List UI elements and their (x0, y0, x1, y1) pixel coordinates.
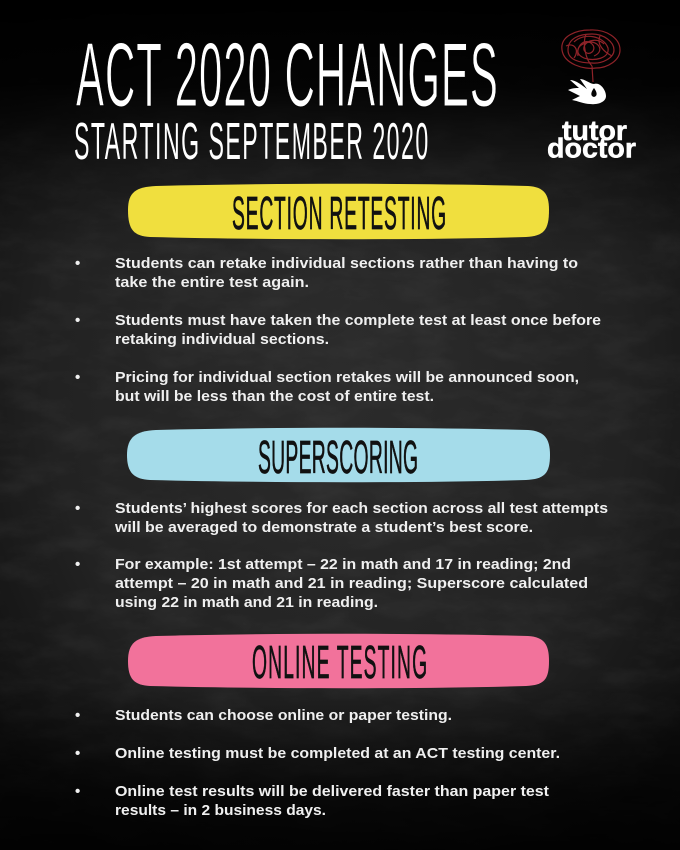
bullet list: • (75, 745, 80, 762)
bullet list: • (75, 312, 80, 329)
bullet list: • (75, 783, 80, 800)
bullet list: Students must have taken the complete test at least once before (115, 312, 601, 329)
bullet list: Pricing for individual section retakes will be announced soon, (115, 369, 579, 386)
bullet list: • (75, 255, 80, 272)
heading: superscoring: SUPERSCORING (258, 433, 418, 483)
logo wordmark: tutor (562, 115, 627, 146)
bullet list: • (75, 500, 80, 517)
bullet list: • (75, 707, 80, 724)
logo wordmark (547, 115, 636, 164)
bullet list: Online test results will be delivered faster than paper test (115, 783, 549, 800)
bullet list: • (75, 369, 80, 386)
heading: online testing: ONLINE TESTING (252, 638, 427, 688)
bullet list: attempt – 20 in math and 21 in reading; Superscore calculated (115, 575, 588, 592)
bullet list (75, 255, 601, 405)
bullet list: retaking individual sections. (115, 331, 329, 348)
bullet list: will be averaged to demonstrate a student’s best score. (114, 519, 533, 536)
subtitle: STARTING SEPTEMBER 2020 (74, 112, 428, 171)
bullet list (75, 707, 560, 819)
bullet list: using 22 in math and 21 in reading. (115, 594, 378, 611)
panel: online testing (75, 634, 560, 819)
heading pill: blue (127, 428, 550, 482)
heading pill: pink (128, 634, 549, 688)
icon: white hand (568, 79, 606, 104)
heading: section retesting: SECTION RETESTING (232, 189, 446, 239)
bullet list: Online testing must be completed at an ACT testing center. (115, 745, 560, 762)
bullet list: Students can choose online or paper testing. (115, 707, 452, 724)
bullet list (75, 500, 608, 611)
panel: section retesting (75, 184, 601, 405)
bullet list: but will be less than the cost of entire test. (115, 388, 434, 405)
heading pill: yellow (128, 184, 549, 239)
bullet list: Students can retake individual sections rather than having to (115, 255, 578, 272)
icon: red scribble brain (562, 30, 620, 82)
bullet list: take the entire test again. (115, 274, 309, 291)
bullet list: • (75, 556, 80, 573)
title: ACT 2020 CHANGES (76, 25, 498, 127)
bullet list: Students’ highest scores for each section across all test attempts (115, 500, 608, 517)
logo wordmark: doctor (547, 132, 636, 164)
bullet list: results – in 2 business days. (115, 802, 326, 819)
panel: superscoring (75, 428, 608, 611)
bullet list: For example: 1st attempt – 22 in math and 17 in reading; 2nd (115, 556, 571, 573)
logo: tutor doctor (547, 30, 636, 163)
